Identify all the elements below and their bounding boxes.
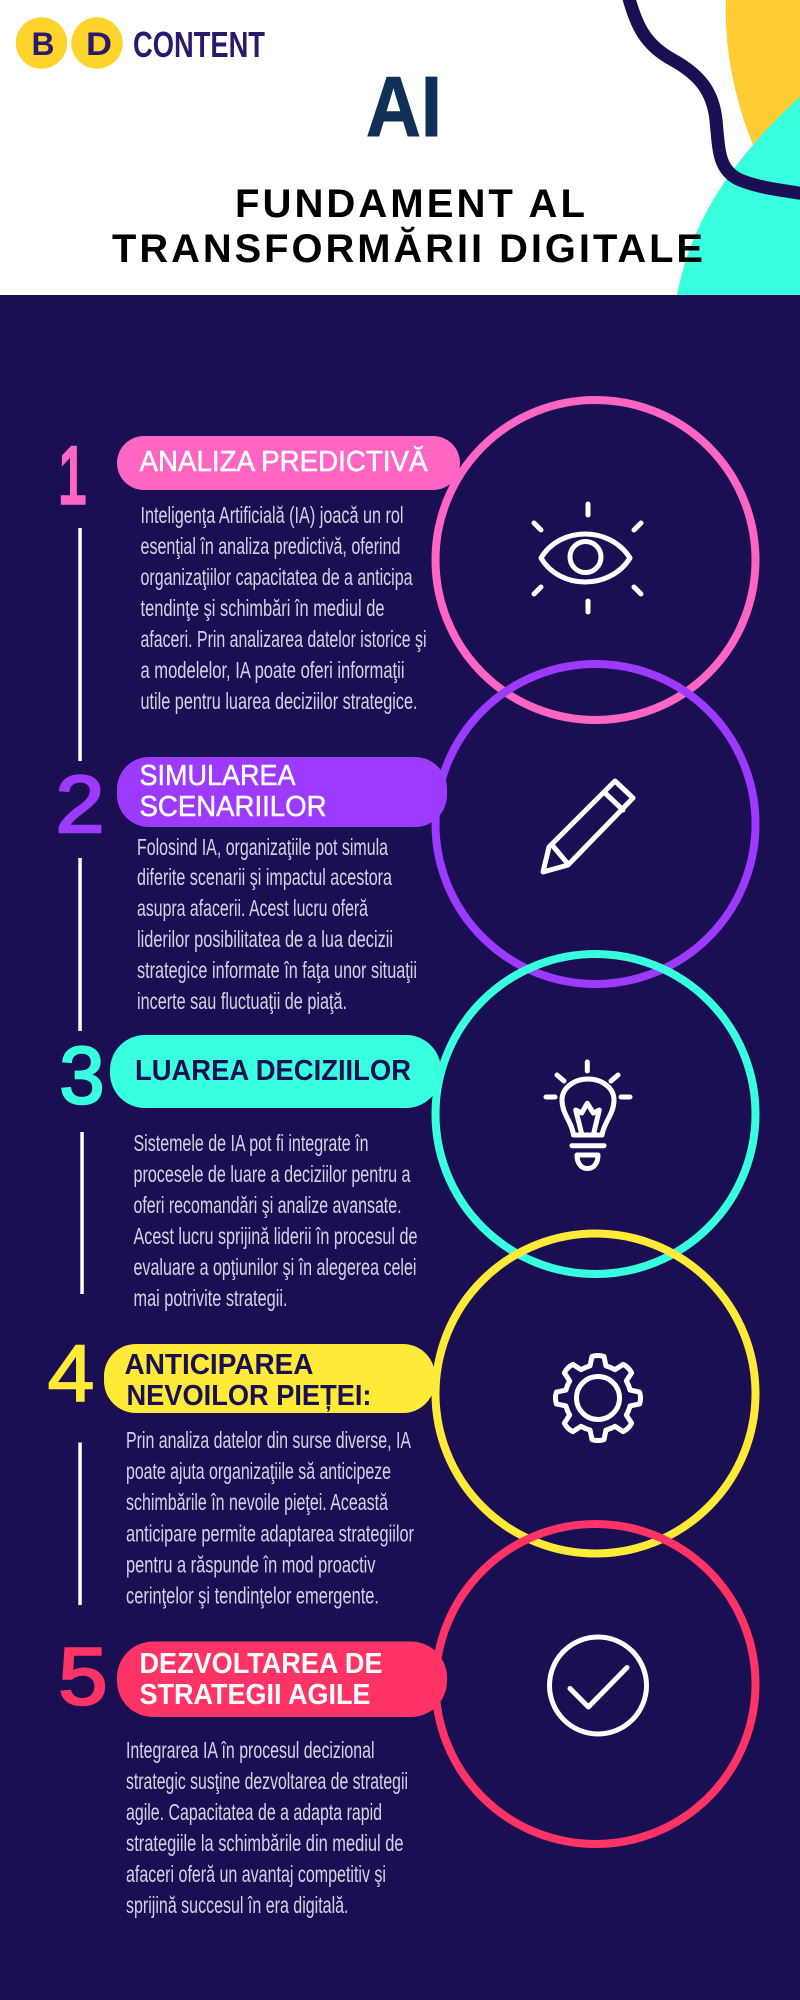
- body text 3: oferi recomandări şi analize avansate.: [134, 1192, 402, 1218]
- body text 3: Acest lucru sprijină liderii în procesul de: [134, 1223, 418, 1249]
- heading pill 2: SCENARIILOR: [140, 791, 326, 823]
- icon: check circle: [550, 1637, 646, 1734]
- icon: gear: [555, 1355, 641, 1441]
- number 5: 5: [58, 1632, 108, 1722]
- body text 3: evaluare a opţiunilor şi în alegerea celei: [134, 1254, 416, 1280]
- ring 2: [436, 664, 756, 984]
- number 1: 1: [58, 431, 87, 521]
- body text 4: Prin analiza datelor din surse diverse, IA: [126, 1427, 411, 1453]
- number 2: 2: [56, 760, 104, 850]
- body text 5: [126, 1737, 408, 1918]
- logo: [16, 17, 265, 69]
- heading pill 4: [104, 1344, 435, 1413]
- panel: anticiparea nevoilor pietei: [48, 1234, 756, 1608]
- heading pill 4: ANTICIPAREA: [124, 1349, 314, 1381]
- body text 2: diferite scenarii şi impactul acestora: [137, 864, 392, 890]
- vertical line 3: [80, 1132, 84, 1294]
- number 3: 3: [60, 1031, 104, 1121]
- subtitle: FUNDAMENT AL: [235, 182, 588, 226]
- body text 4: pentru a răspunde în mod proactiv: [126, 1552, 376, 1578]
- body text 5: strategic susţine dezvoltarea de strategii: [126, 1768, 408, 1794]
- ring 1: [436, 400, 756, 720]
- decorative navy curve: [628, 0, 800, 194]
- body text 1: utile pentru luarea deciziilor strategice.: [140, 688, 418, 714]
- logo: CONTENT: [133, 24, 265, 65]
- ring 5: [436, 1524, 756, 1844]
- ring 4: [436, 1234, 756, 1554]
- body text 1: tendinţe şi schimbări în mediul de: [140, 595, 384, 621]
- heading pill 1: ANALIZA PREDICTIVĂ: [140, 445, 428, 478]
- panel: luarea deciziilor: [60, 954, 756, 1311]
- panel: simularea scenariilor: [56, 664, 756, 1031]
- decorative teal shape: [677, 97, 800, 295]
- heading pill 2: SIMULAREA: [140, 760, 296, 792]
- header panel: [0, 0, 800, 295]
- body text 2: liderilor posibilitatea de a lua decizii: [137, 926, 393, 952]
- logo: D: [86, 26, 112, 62]
- body text 3: Sistemele de IA pot fi integrate în: [134, 1130, 368, 1156]
- icon: eye: [534, 504, 641, 612]
- body text 4: [126, 1427, 414, 1608]
- heading pill 3: LUAREA DECIZIILOR: [135, 1055, 411, 1087]
- body text 4: schimbările în nevoile pieţei. Această: [126, 1489, 388, 1515]
- icon: pencil: [543, 781, 633, 872]
- subtitle: TRANSFORMĂRII DIGITALE: [112, 226, 706, 271]
- decorative gold shape: [726, 0, 800, 145]
- heading pill 5: [117, 1642, 447, 1717]
- heading pill 1: [117, 436, 460, 490]
- body text 5: agile. Capacitatea de a adapta rapid: [126, 1799, 382, 1825]
- body text 1: organizaţiilor capacitatea de a anticipa: [140, 564, 413, 590]
- number 4: 4: [48, 1329, 94, 1419]
- panel: analiza predictiva: [58, 400, 756, 761]
- vertical line 4: [78, 1442, 82, 1605]
- body text 2: incerte sau fluctuaţii de piaţă.: [137, 988, 347, 1014]
- body text 1: Inteligenţa Artificială (IA) joacă un rol: [140, 502, 404, 528]
- body text 5: sprijină succesul în era digitală.: [126, 1892, 348, 1918]
- body text 3: mai potrivite strategii.: [134, 1285, 288, 1311]
- body text 3: procesele de luare a deciziilor pentru a: [134, 1161, 411, 1187]
- heading pill 5: DEZVOLTAREA DE: [140, 1648, 382, 1680]
- icon: light bulb: [546, 1062, 630, 1168]
- vertical line 2: [78, 858, 82, 1031]
- body text 1: a modelelor, IA poate oferi informaţii: [140, 657, 404, 683]
- heading pill 5: STRATEGII AGILE: [140, 1679, 370, 1711]
- body text 4: anticipare permite adaptarea strategiilor: [126, 1520, 414, 1546]
- title: AI: AI: [366, 60, 442, 155]
- body text 1: afaceri. Prin analizarea datelor istorice şi: [140, 626, 426, 652]
- logo: B: [32, 26, 54, 62]
- heading pill 4: NEVOILOR PIEȚEI:: [126, 1380, 372, 1412]
- ring 3: [436, 954, 756, 1274]
- subtitle: [112, 182, 706, 271]
- body text 5: afaceri oferă un avantaj competitiv şi: [126, 1861, 386, 1887]
- body text 2: Folosind IA, organizaţiile pot simula: [137, 834, 388, 860]
- body text 5: Integrarea IA în procesul decizional: [126, 1737, 374, 1763]
- body text 1: esenţial în analiza predictivă, oferind: [140, 533, 400, 559]
- vertical line 1: [78, 528, 82, 761]
- body text 3: [134, 1130, 418, 1311]
- body text 5: strategiile la schimbările din mediul de: [126, 1830, 404, 1856]
- body text 4: cerinţelor şi tendinţelor emergente.: [126, 1582, 379, 1608]
- heading pill 2: [117, 757, 447, 827]
- body text 1: [140, 502, 426, 714]
- body text 2: asupra afacerii. Acest lucru oferă: [137, 895, 368, 921]
- body text 2: strategice informate în faţa unor situaţii: [137, 957, 417, 983]
- heading pill 3: [110, 1035, 441, 1108]
- panel: dezvoltarea de strategii agile: [58, 1524, 756, 1918]
- body text 2: [137, 834, 417, 1014]
- body text 4: poate ajuta organizaţiile să anticipeze: [126, 1458, 391, 1484]
